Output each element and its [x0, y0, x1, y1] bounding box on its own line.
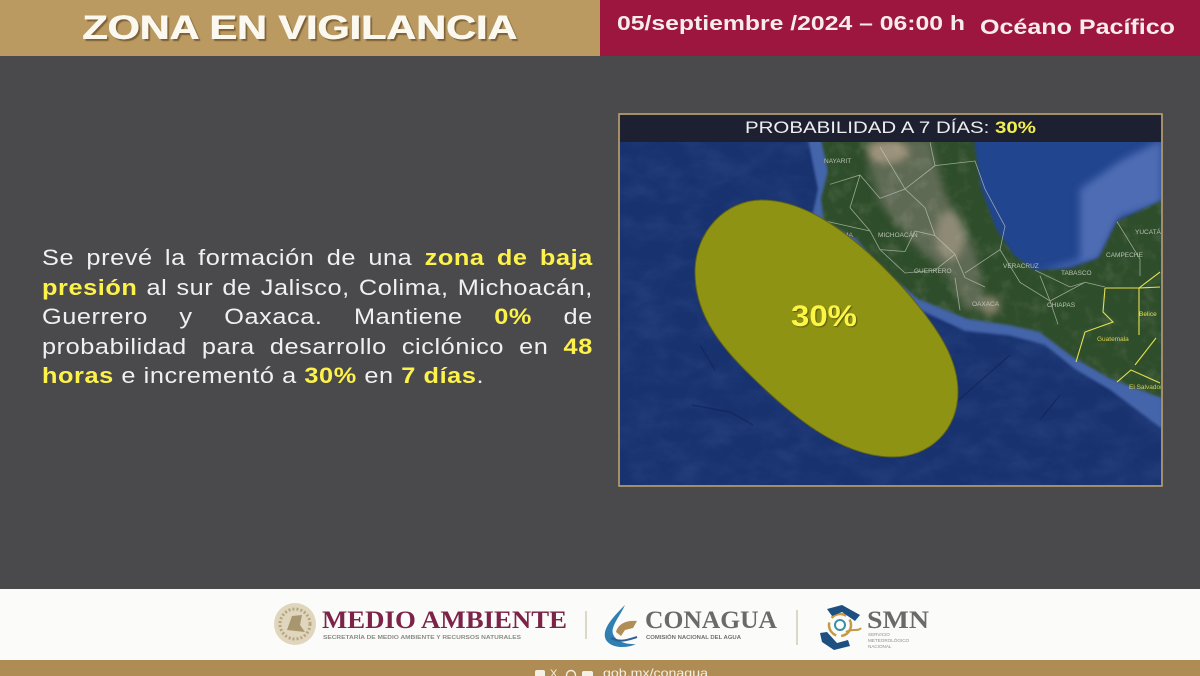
- place labels: CHIAPAS: [1047, 302, 1076, 309]
- continental shelf: [808, 140, 1162, 429]
- map image: [620, 115, 1166, 486]
- Yucatan shelf: [1047, 142, 1161, 270]
- panel: probability map: [618, 113, 1163, 487]
- description text block: horas e incrementó a 30% en 7 días.: [42, 363, 484, 388]
- header band: title on gold: [0, 0, 600, 56]
- footer logo strip: [0, 589, 1200, 660]
- logo: smn: SMN: [867, 607, 929, 634]
- place labels: [824, 158, 1166, 391]
- national borders: [1076, 272, 1160, 383]
- description text block: Guerrero y Oaxaca. Mantiene 0% de: [42, 304, 593, 329]
- map title text: PROBABILIDAD A 7 DÍAS: 30%: [745, 118, 1036, 137]
- map title bar: [620, 115, 1161, 142]
- place labels: El Salvador: [1129, 384, 1163, 391]
- place labels: MICHOACÁN: [878, 230, 918, 239]
- description text block: probabilidad para desarrollo ciclónico en 48: [42, 334, 593, 359]
- logo: medio ambiente: SECRETARÍA DE MEDIO AMBIENTE Y RECURSOS NATURALES: [323, 633, 521, 641]
- place labels: CAMPECHE: [1106, 252, 1144, 259]
- place labels: Guatemala: [1097, 336, 1129, 343]
- logo: smn: SERVICIO: [868, 632, 890, 637]
- title: ZONA EN VIGILANCIA: [82, 9, 517, 47]
- ocean region: Océano Pacífico: [980, 16, 1175, 39]
- state borders: [828, 142, 1140, 324]
- logo: medio ambiente: [274, 603, 567, 645]
- description text block: [42, 245, 593, 388]
- icon: conagua drop: [605, 605, 637, 647]
- logo: medio ambiente: MEDIO AMBIENTE: [322, 607, 567, 634]
- place labels: OAXACA: [972, 301, 1000, 308]
- logo: smn: NACIONAL: [868, 644, 892, 649]
- map frame: [619, 114, 1162, 486]
- footer gold band: [0, 660, 1200, 676]
- highlands: [825, 142, 1161, 392]
- icon: smn gear spiral: [820, 605, 861, 650]
- Gulf of Mexico: [974, 142, 1161, 270]
- logo: conagua: [605, 605, 777, 647]
- header band: date and region on crimson: [600, 0, 1200, 56]
- place labels: Belice: [1139, 311, 1157, 318]
- description text block: presión al sur de Jalisco, Colima, Michoacán,: [42, 275, 593, 300]
- logo: smn: METEOROLÓGICO: [868, 637, 910, 643]
- icon: national seal: [274, 603, 316, 645]
- sea floor ridges: [692, 345, 1060, 425]
- place labels: COLIMA: [828, 232, 854, 239]
- logo: conagua: CONAGUA: [645, 607, 777, 634]
- land: [821, 140, 1162, 398]
- logo: smn: [820, 605, 929, 650]
- watch zone: [695, 200, 958, 457]
- description text block: Se prevé la formación de una zona de baja: [42, 245, 593, 270]
- social icons: [535, 668, 593, 676]
- date and time: 05/septiembre /2024 – 06:00 h: [617, 13, 965, 35]
- place labels: NAYARIT: [824, 158, 851, 165]
- place labels: GUERRERO: [914, 268, 952, 275]
- logo: conagua: COMISIÓN NACIONAL DEL AGUA: [646, 633, 741, 641]
- place labels: VERACRUZ: [1003, 263, 1039, 270]
- place labels: TABASCO: [1061, 270, 1092, 277]
- zone percentage: 30%: [791, 300, 857, 333]
